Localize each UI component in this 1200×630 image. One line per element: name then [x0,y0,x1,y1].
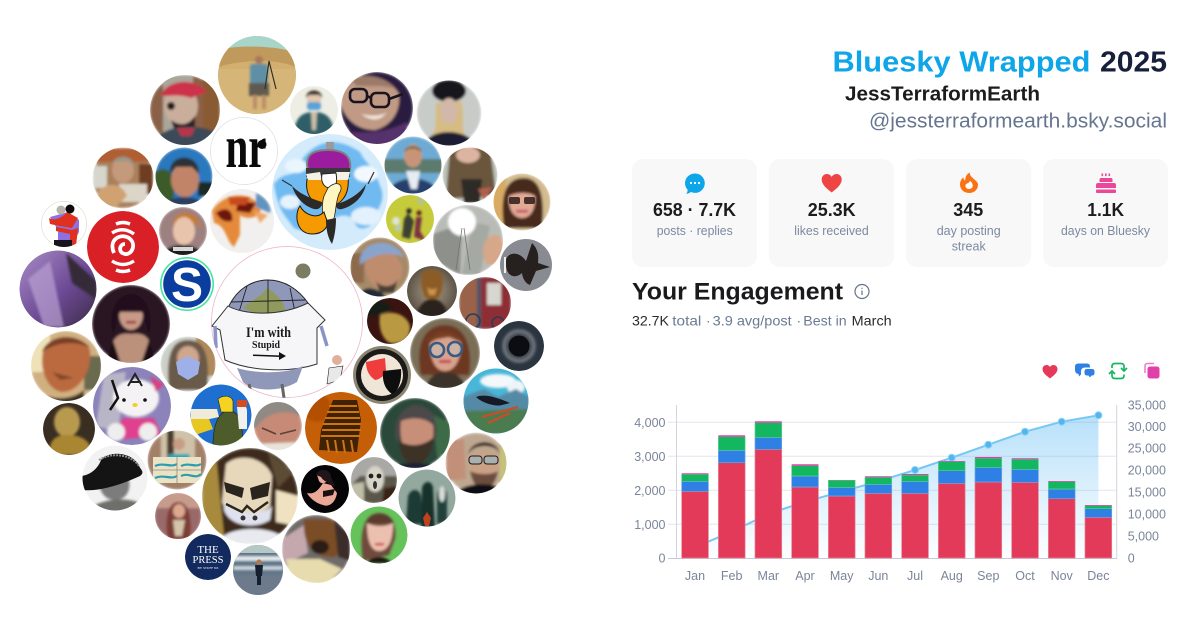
icon: flame [960,173,978,193]
display name: JessTerraformEarth [845,84,1040,106]
avatar: The Press logo: BY STUFF NZ [198,566,218,570]
left axis labels: 4,000 [634,416,666,430]
avatar: golden baby statue [43,403,95,455]
avatar: woman in blue mask [160,336,216,392]
month labels: May [830,569,854,583]
month labels: Dec [1087,569,1110,583]
shirt text [246,325,292,351]
axes [668,405,1117,558]
arms [215,326,327,348]
bar: July [902,474,928,558]
avatar: The Press logo [185,534,231,580]
bar: November [1048,481,1075,558]
moon [296,264,310,278]
engagement summary line: 32.7K [632,313,670,329]
bar: December [1085,505,1112,558]
avatar: woman on green background [350,506,408,564]
avatar: woman with painting [148,430,206,490]
handle: @jessterraformearth.bsky.social [869,110,1167,132]
right axis labels: 30,000 [1128,420,1166,434]
avatar: man in beanie [154,148,214,206]
avatar: Hello Kitty plush [93,367,171,445]
left axis labels: 1,000 [634,518,666,532]
avatar: woman with blue round glasses [410,318,480,389]
avatar: fox bird with crown [272,134,388,250]
avatar: man in blue cap [350,238,410,299]
caption: days on Bluesky [1061,223,1150,238]
right axis labels: 0 [1128,551,1135,565]
grid lines [668,422,1117,524]
icon: birthday cake [1096,174,1116,193]
month labels: Oct [1015,569,1035,583]
right axis labels: 35,000 [1128,398,1166,412]
heading: Your Engagement: Your Engagement [632,278,843,306]
stat card: posts and replies [632,159,757,267]
heading: Bluesky Wrapped 2025: Bluesky Wrapped [832,46,1090,78]
bar: April [792,464,818,558]
bar: February [718,435,745,558]
left axis labels: 3,000 [634,450,666,464]
avatar: bearded man [380,398,451,469]
icon: heart [822,174,842,192]
avatar: The Press logo: THE [197,544,219,556]
stat card: likes received [769,159,894,267]
avatar: smiling man with glasses [341,72,413,148]
avatar: Simpsons scene [189,384,252,447]
avatar: scowling red-faced man [30,331,102,406]
avatar: man in kilt with tripod [218,36,296,114]
avatar: woman in black glasses [492,172,550,232]
avatar: solar eclipse [494,321,544,371]
avatar: grey haired zombie [350,456,398,504]
avatar: three hooded figures [398,470,456,528]
cumulative dots [912,412,1102,474]
cumulative area [695,415,1098,558]
avatar: blonde in veil [417,80,481,147]
engagement summary line: · [706,313,711,329]
caption [937,223,1001,254]
arrow [253,352,286,360]
avatar: dog with book [282,515,350,585]
avatar: tui bird on branch [463,368,529,434]
avatar: man in suit [383,136,443,195]
left axis labels: 0 [659,552,666,566]
avatar: S logo [160,257,214,312]
avatar: dark bird on grey [500,238,552,292]
avatar: grey haired man at table [93,148,153,208]
panel: avatar bubble cloud [20,36,552,595]
avatar: hugging figures [41,201,87,248]
avatar: stormtrooper [202,448,298,544]
avatar: grey tunnel with face [433,205,504,275]
month labels: Sep [977,569,999,583]
month labels: Nov [1051,569,1074,583]
avatar: person on beach [233,545,283,595]
right axis labels: 10,000 [1128,507,1166,521]
avatar: long haired woman [442,147,498,203]
value: 345 [953,200,983,220]
avatar: man in black sombrero [82,446,148,514]
engagement summary line: · [796,313,801,329]
legend: quotes copy squares [1145,364,1160,378]
bar: September [975,457,1002,558]
globe top [228,280,308,316]
avatar: cartoon woman on black [301,465,349,513]
t-shirt [212,303,325,370]
month labels: Feb [721,569,743,583]
avatar: I'm with Stupid cartoon [211,246,363,402]
cumulative line [695,415,1098,547]
caption: likes received [794,223,869,238]
heading: Bluesky Wrapped 2025: 2025 [1100,46,1167,78]
globe bottom and legs [237,366,303,402]
chart legend icons [1042,364,1160,378]
right axis labels: 15,000 [1128,485,1166,499]
icon: speech bubble [685,173,705,194]
avatar: heat map globe [210,189,274,253]
month labels: Jan [685,569,705,583]
shirt text: I'm with [246,325,292,341]
avatar: man close-up with glasses [254,402,302,450]
icon: info [855,284,869,298]
avatar: vintage microphone [303,392,377,464]
avatar: small woman with red hair [154,492,202,540]
right axis labels: 5,000 [1128,529,1159,543]
month labels [685,569,1110,583]
legend: replies bubbles [1075,364,1094,378]
month labels: Aug [941,569,963,583]
engagement summary line: March [852,313,892,329]
avatar: man in reflective sunglasses [446,433,508,497]
caption: posts · replies [657,223,733,238]
avatar: theatre masks badge [353,346,411,404]
bar: January [682,473,708,558]
right axis labels: 20,000 [1128,463,1166,477]
bar: October [1012,458,1038,558]
stat card: days on Bluesky [1043,159,1168,267]
caption: day posting [937,223,1001,238]
value: 658 · 7.7K [653,200,736,220]
left axis labels: 2,000 [634,484,666,498]
avatar: nr logo [210,114,278,185]
bar: August [938,461,965,558]
stat card: day posting streak [906,159,1031,267]
bar: June [865,476,892,558]
bar: March [755,421,782,558]
engagement summary line: Best in [803,313,847,329]
engagement summary line: total [672,313,701,329]
left axis labels [634,416,666,566]
legend: likes heart [1042,365,1058,378]
avatar: man with red bandana [150,75,220,150]
avatar: raven [364,298,413,344]
avatar: dark haired woman [92,285,170,364]
small man [327,355,343,384]
engagement summary line: 3.9 avg/post [713,313,792,329]
shirt text: Stupid [252,339,280,351]
right axis labels: 25,000 [1128,442,1166,456]
month labels: Mar [758,569,779,583]
month labels: Apr [795,569,815,583]
chart: monthly engagement stacked bars with cumulative line [634,398,1166,583]
month labels: Jun [868,569,888,583]
avatar: S logo: S [171,259,203,312]
avatar: bicycle in street [459,277,511,329]
avatar: chewbacca portrait [407,266,457,317]
month labels: Jul [907,569,923,583]
avatar: red swirl logo [87,211,159,283]
avatar: purple streaks [20,250,96,328]
avatar: ginger young man [159,207,207,257]
value: 25.3K [808,200,856,220]
right axis labels [1128,398,1166,565]
bar: May [828,480,855,558]
avatar: illustrated man with blue mask [290,86,338,136]
avatar: The Press logo: PRESS [192,554,224,566]
avatar: yellow illustration [386,195,434,243]
legend: reposts arrows [1109,364,1127,378]
avatar: nr logo: nr [226,114,266,180]
value: 1.1K [1087,200,1124,220]
caption: streak [952,239,986,254]
